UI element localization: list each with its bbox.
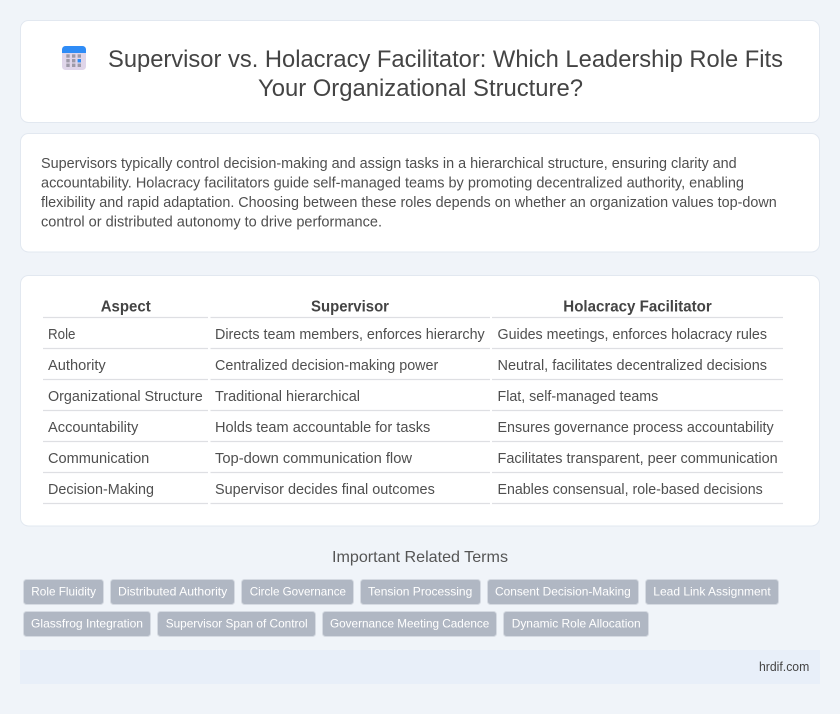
chip: Governance Meeting Cadence (322, 612, 496, 636)
chip: Dynamic Role Allocation (504, 612, 648, 636)
chip: Governance Meeting Cadence: Governance Meeting Cadence (330, 617, 490, 631)
row: Decision-Making: Supervisor decides final outcomes (215, 482, 435, 498)
panel: summary text: flexibility and rapid adaptation. Choosing between these roles depends on whether an organization values top-down (41, 195, 777, 211)
chip: Supervisor Span of Control (158, 612, 316, 636)
chip: Tension Processing: Tension Processing (368, 585, 472, 599)
panel: summary text: control or distributed autonomy to drive performance. (41, 214, 382, 230)
row: Authority: Authority (48, 358, 107, 374)
row: Authority: Neutral, facilitates decentralized decisions (498, 358, 767, 374)
footer bar (20, 650, 820, 684)
title: Supervisor vs. Holacracy Facilitator: Which Leadership Role Fits (108, 46, 783, 73)
chip: Distributed Authority: Distributed Authority (118, 585, 227, 599)
chip: Glassfrog Integration (24, 612, 150, 636)
title (108, 46, 783, 102)
panel: comparison table (20, 276, 820, 526)
heading: related terms: Important Related Terms (332, 549, 508, 566)
chip: Tension Processing (360, 580, 480, 604)
chip: Distributed Authority (110, 580, 234, 604)
footer bar: hrdif.com (759, 659, 809, 674)
table header: Holacracy Facilitator (563, 299, 712, 316)
row: Decision-Making: Decision-Making (48, 482, 154, 498)
row: Authority (43, 358, 783, 380)
table header: Supervisor (311, 299, 389, 316)
title: Your Organizational Structure? (258, 75, 583, 102)
chip: Consent Decision-Making (488, 580, 638, 604)
chip: Circle Governance (242, 580, 354, 604)
row: Accountability (43, 420, 783, 442)
chip: Supervisor Span of Control: Supervisor Span of Control (166, 617, 308, 631)
row: Organizational Structure: Traditional hierarchical (215, 389, 360, 405)
panel: title card (20, 20, 820, 122)
row: Communication: Top-down communication flow (215, 451, 413, 467)
icon: calendar (62, 46, 86, 70)
chip: Lead Link Assignment: Lead Link Assignment (653, 585, 771, 599)
row: Organizational Structure (43, 389, 783, 410)
row: Communication: Communication (48, 451, 149, 467)
chip: Role Fluidity: Role Fluidity (31, 585, 96, 599)
row: Accountability: Accountability (48, 420, 139, 436)
row: Communication (43, 451, 783, 472)
chip: Role Fluidity (24, 580, 104, 604)
panel: summary text: Supervisors typically control decision-making and assign tasks in a hierarchical structure, ensuring clarity and (41, 156, 737, 172)
related term chips (24, 580, 778, 636)
row: Organizational Structure: Organizational Structure (48, 389, 203, 405)
chip: Dynamic Role Allocation: Dynamic Role Allocation (512, 617, 641, 631)
table header (43, 299, 783, 318)
row: Accountability: Holds team accountable for tasks (215, 420, 430, 436)
row: Communication: Facilitates transparent, peer communication (498, 451, 778, 467)
row: Accountability: Ensures governance process accountability (498, 420, 774, 436)
table header: Aspect (101, 299, 151, 316)
panel: summary text (20, 134, 820, 252)
chip: Consent Decision-Making: Consent Decision-Making (495, 585, 631, 599)
row: Role: Role (48, 327, 76, 343)
row: Role: Directs team members, enforces hierarchy (215, 327, 485, 343)
row: Authority: Centralized decision-making power (215, 358, 438, 374)
row: Decision-Making: Enables consensual, role-based decisions (498, 482, 763, 498)
row: Organizational Structure: Flat, self-managed teams (498, 389, 658, 405)
row: Role: Guides meetings, enforces holacracy rules (498, 327, 767, 343)
row: Role (43, 327, 783, 348)
panel: summary text: accountability. Holacracy facilitators guide self-managed teams by promoting decentralized authority, enabling (41, 176, 744, 192)
chip: Glassfrog Integration: Glassfrog Integration (31, 617, 143, 631)
chip: Circle Governance: Circle Governance (250, 585, 346, 599)
chip: Lead Link Assignment (646, 580, 778, 604)
row: Decision-Making (43, 482, 783, 504)
